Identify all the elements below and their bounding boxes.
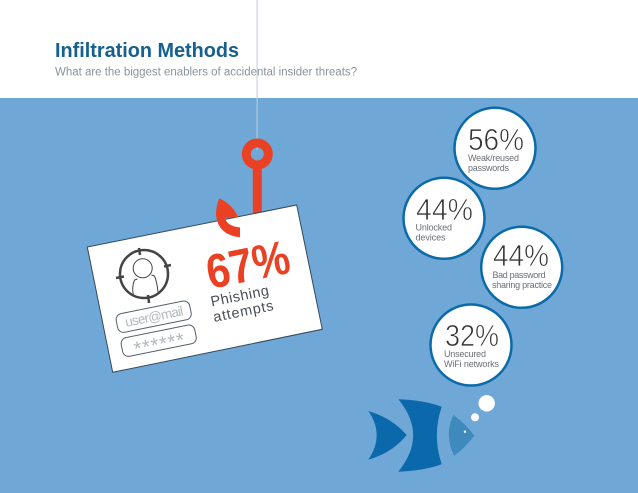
thought bubbles bbox=[471, 395, 495, 421]
stat bubble: 56% bbox=[454, 108, 536, 189]
icon: fish hook eye and shaft bbox=[246, 143, 268, 213]
label: phishing attempts: attempts bbox=[212, 298, 275, 326]
icon: hook barb bbox=[216, 198, 240, 237]
email input field bbox=[115, 300, 192, 333]
stat bubble: 56%: passwords bbox=[468, 163, 510, 173]
stat bubble: 32% bbox=[430, 304, 512, 386]
stat bubble: 56%: Weak/reused bbox=[468, 153, 519, 163]
label: phishing attempts bbox=[209, 283, 275, 326]
subtitle: What are the biggest enablers of accidental insider threats? bbox=[55, 66, 357, 78]
stat bubble: 32%: Unsecured bbox=[444, 349, 486, 359]
fish eye bbox=[464, 430, 466, 433]
stat bubble: 44% bad password bbox=[481, 227, 562, 308]
panel: phishing card bbox=[87, 198, 322, 372]
stat bubble: 32%: 32% bbox=[445, 318, 499, 353]
stat bubble: 44% bad password: 44% bbox=[493, 238, 549, 273]
stat bubble: 44% unlocked bbox=[404, 178, 484, 259]
fish body bbox=[398, 399, 442, 472]
email input field: user@mail bbox=[124, 303, 185, 330]
title: Infiltration Methods bbox=[55, 40, 239, 62]
stat: 67%: 67% bbox=[202, 231, 295, 300]
card background bbox=[87, 205, 322, 372]
fishing line bbox=[257, 0, 258, 150]
fish tail bbox=[368, 411, 407, 460]
icon: targeted user bbox=[116, 248, 171, 303]
password input field: ****** bbox=[132, 329, 187, 361]
password input field bbox=[120, 324, 198, 363]
stat bubble: 32%: WiFi networks bbox=[444, 359, 500, 369]
stat bubble: 44% unlocked: 44% bbox=[416, 192, 473, 227]
stat bubble: 44% bad password: Bad password bbox=[492, 270, 546, 280]
stat bubble: 44% unlocked: devices bbox=[416, 232, 446, 242]
icon: fish bbox=[368, 399, 474, 472]
fish head bbox=[449, 415, 474, 456]
stat bubble: 56%: 56% bbox=[468, 122, 524, 157]
stat bubble: 44% unlocked: Unlocked bbox=[416, 222, 452, 232]
stat bubble: 44% bad password: sharing practice bbox=[492, 280, 552, 290]
label: phishing attempts: Phishing bbox=[209, 283, 270, 310]
